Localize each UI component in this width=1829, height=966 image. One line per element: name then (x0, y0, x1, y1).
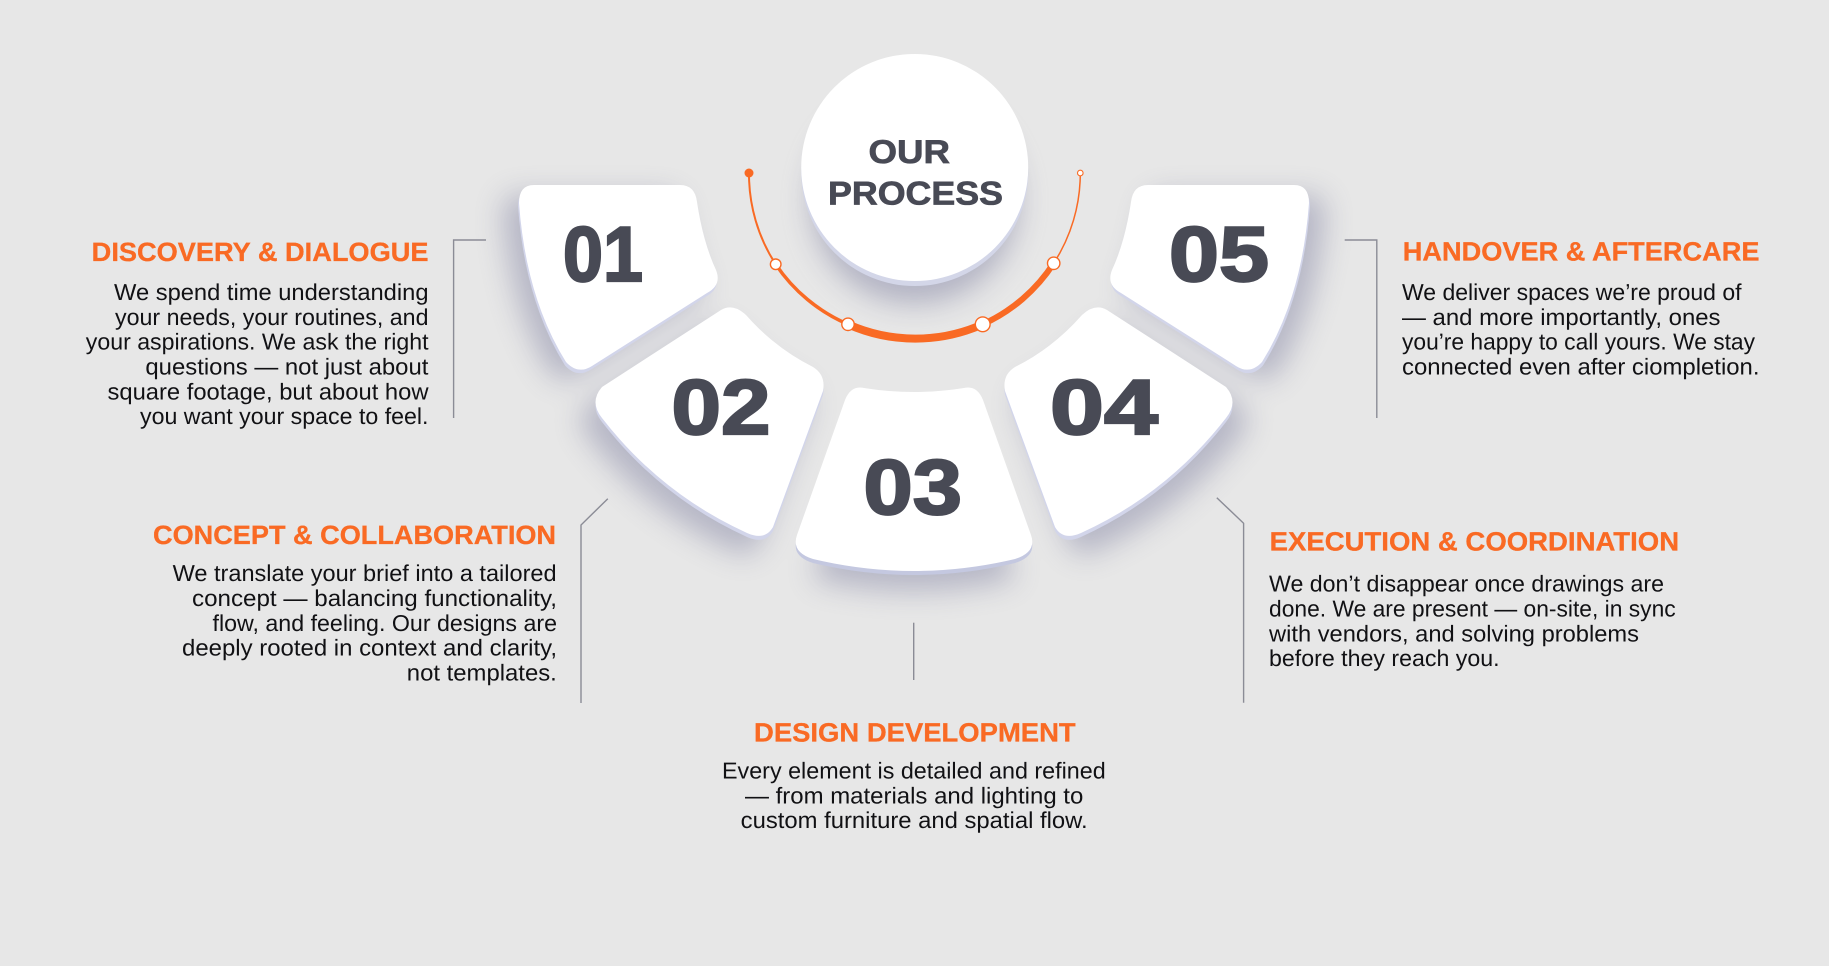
heading: CONCEPT & COLLABORATION (153, 520, 556, 550)
text block: concept and collaboration (153, 520, 557, 685)
connector: step 01 (454, 240, 486, 418)
card 05 shape (1110, 185, 1309, 370)
body: connected even after ciompletion. (1402, 353, 1760, 379)
center circle: our process (801, 54, 1028, 286)
card 03 shape (796, 388, 1032, 571)
panel: step 03 (796, 388, 1032, 575)
heading: EXECUTION & COORDINATION (1270, 527, 1679, 557)
body: square footage, but about how (108, 378, 429, 404)
card 01 shape (519, 185, 718, 370)
card 04 shape (1004, 307, 1232, 536)
panel: step 01 (518, 185, 718, 373)
heading: DESIGN DEVELOPMENT (754, 718, 1076, 748)
connector: step 04 (1217, 498, 1244, 703)
connector: step 03 (913, 623, 915, 680)
body: done. We are present — on-site, in sync (1269, 596, 1676, 622)
body: We translate your brief into a tailored (173, 560, 557, 586)
card 02 shape (596, 307, 824, 536)
body: Every element is detailed and refined (722, 757, 1106, 783)
number 01: 01 (563, 210, 643, 298)
number 04: 04 (1050, 363, 1158, 451)
number 03: 03 (864, 443, 962, 531)
body: We deliver spaces we’re proud of (1402, 279, 1742, 305)
panel: step 04 (1004, 307, 1232, 540)
title: OUR (868, 133, 950, 170)
card shadows (503, 195, 1325, 591)
text block: execution and coordination (1268, 527, 1679, 671)
body: custom furniture and spatial flow. (741, 807, 1088, 833)
heading: DISCOVERY & DIALOGUE (92, 237, 428, 267)
body: We spend time understanding (114, 279, 428, 305)
title: PROCESS (828, 174, 1003, 212)
body: you want your space to feel. (140, 403, 428, 429)
body: before they reach you. (1269, 645, 1500, 671)
body: your aspirations. We ask the right (86, 329, 429, 355)
body: your needs, your routines, and (115, 304, 428, 330)
body: not templates. (407, 659, 557, 685)
center circle shadow (811, 96, 1019, 304)
panel: step 02 (596, 307, 824, 540)
number 05: 05 (1169, 210, 1269, 298)
connector: step 05 (1345, 240, 1377, 418)
connector: step 02 (581, 499, 608, 703)
body: We don’t disappear once drawings are (1269, 571, 1664, 597)
number 02: 02 (672, 363, 770, 451)
body: concept — balancing functionality, (192, 585, 557, 611)
progress arc with dots (744, 168, 1083, 339)
body: flow, and feeling. Our designs are (212, 610, 557, 636)
text block: design development (722, 718, 1106, 833)
body: deeply rooted in context and clarity, (182, 635, 557, 661)
heading: HANDOVER & AFTERCARE (1403, 237, 1760, 267)
panel: step 05 (1110, 185, 1310, 373)
body: — from materials and lighting to (745, 782, 1083, 808)
text block: handover and aftercare (1402, 237, 1760, 379)
body: questions — not just about (145, 353, 429, 379)
body: — and more importantly, ones (1402, 304, 1720, 330)
body: you’re happy to call yours. We stay (1402, 329, 1755, 355)
body: with vendors, and solving problems (1268, 620, 1639, 646)
text block: discovery and dialogue (86, 237, 429, 429)
